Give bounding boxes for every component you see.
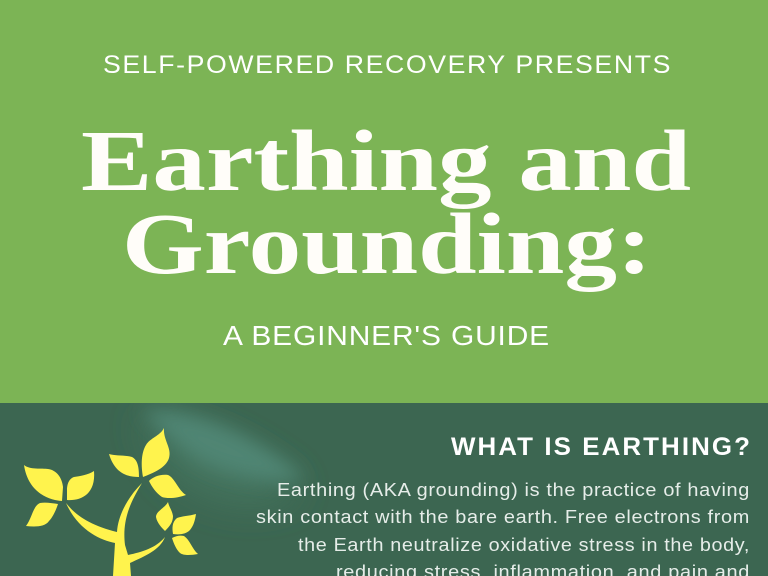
- leaves: upper group: [109, 454, 139, 477]
- leaves: lower group: [156, 502, 173, 531]
- tree trunk and branches: [66, 483, 165, 576]
- light glow: [140, 410, 305, 503]
- panel: dark green section: [0, 401, 768, 576]
- panel: green header background: [0, 0, 768, 403]
- title: Earthing and: [81, 112, 691, 209]
- presenter line: SELF-POWERED RECOVERY PRESENTS: [103, 51, 672, 79]
- leaves: left group: [24, 465, 63, 501]
- body text: Earthing (AKA grounding) is the practice of having: [277, 480, 750, 500]
- title: [81, 112, 691, 292]
- body text: skin contact with the bare earth. Free electrons from: [256, 507, 750, 527]
- heading: what is earthing: WHAT IS EARTHING?: [451, 433, 752, 461]
- icon: yellow tree: [24, 428, 198, 576]
- body text: [256, 480, 750, 576]
- subtitle: A BEGINNER'S GUIDE: [223, 320, 550, 351]
- body text: the Earth neutralize oxidative stress in the body,: [298, 535, 750, 555]
- title: Grounding:: [122, 195, 652, 292]
